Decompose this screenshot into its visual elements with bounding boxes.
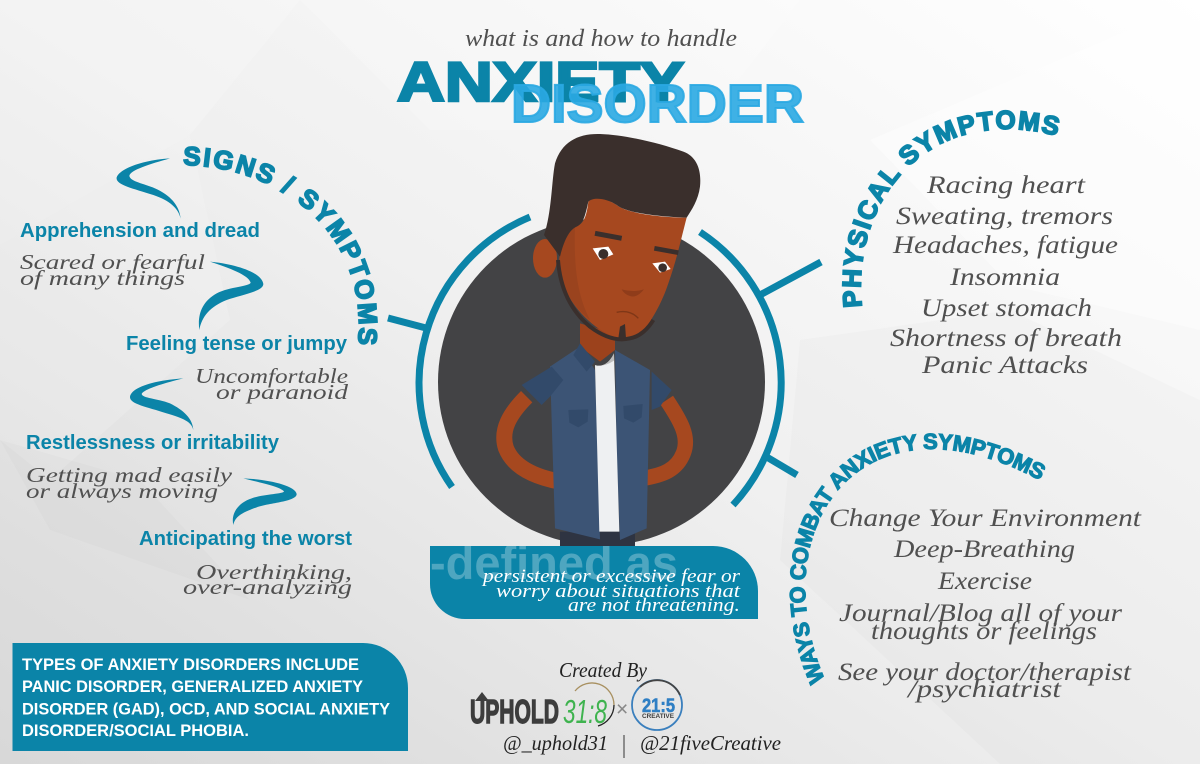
definition text: persistent or excessive fear or <box>481 567 741 587</box>
connector: signs <box>388 318 426 328</box>
swoosh connector 2 <box>199 262 263 330</box>
item: restlessness or irritability <box>26 432 280 503</box>
ring: right arc <box>700 232 781 505</box>
title word: anxiety: ANXIETY <box>397 50 684 113</box>
item description: or always moving <box>26 479 218 503</box>
item description: or paranoid <box>216 380 348 404</box>
title word: disorder: DISORDER <box>511 74 804 134</box>
list: ways to combat <box>829 503 1142 703</box>
panel: types of anxiety disorders <box>12 643 408 751</box>
heading: signs / symptoms: SIGNS / SYMPTOMS <box>183 146 378 345</box>
item description: Getting mad easily <box>26 463 233 487</box>
list: ways to combat: Journal/Blog all of your <box>839 598 1122 627</box>
item description: over-analyzing <box>183 575 352 599</box>
heading: ways to combat anxiety symptoms: WAYS TO COMBAT ANXIETY SYMPTOMS <box>789 433 1046 686</box>
item heading: Feeling tense or jumpy <box>126 333 348 355</box>
central figure in circle <box>388 134 821 548</box>
definition text: are not threatening. <box>568 596 740 616</box>
list: physical symptoms: Shortness of breath <box>890 323 1122 352</box>
item description <box>20 250 205 290</box>
list: ways to combat: Change Your Environment <box>829 503 1142 532</box>
list: physical symptoms: Sweating, tremors <box>896 201 1113 230</box>
list: physical symptoms: Upset stomach <box>921 293 1092 322</box>
credits <box>470 658 781 758</box>
item description <box>183 560 352 599</box>
item heading: Anticipating the worst <box>139 528 352 550</box>
list: physical symptoms <box>890 170 1122 379</box>
logo: uphold 31:8: 31:8 <box>563 693 607 730</box>
panel text <box>22 656 390 740</box>
ring: left arc <box>419 217 530 487</box>
list: physical symptoms: Panic Attacks <box>921 350 1088 379</box>
list: ways to combat: Exercise <box>937 566 1032 595</box>
item description: Overthinking, <box>196 560 352 584</box>
title <box>397 50 804 134</box>
panel text: DISORDER/SOCIAL PHOBIA. <box>22 722 249 740</box>
item description: Uncomfortable <box>195 364 349 388</box>
swoosh connector 3 <box>130 378 193 430</box>
item heading: Restlessness or irritability <box>26 432 280 454</box>
subtitle: what is and how to handle <box>465 26 737 52</box>
list: ways to combat: See your doctor/therapist <box>838 657 1132 686</box>
item description: of many things <box>20 266 185 290</box>
created by: Created By <box>559 658 648 682</box>
item description <box>26 463 233 503</box>
heading: physical symptoms: PHYSICAL SYMPTOMS <box>842 110 1060 308</box>
list: ways to combat: thoughts or feelings <box>871 616 1097 645</box>
list: ways to combat: Deep-Breathing <box>893 534 1075 563</box>
watermark: defined as: -defined as <box>430 536 678 589</box>
list: physical symptoms: Insomnia <box>949 262 1060 291</box>
item heading: Apprehension and dread <box>20 220 260 242</box>
panel text: PANIC DISORDER, GENERALIZED ANXIETY <box>22 678 363 696</box>
item: anticipating the worst <box>139 528 352 599</box>
handle: 21five creative: @21fiveCreative <box>640 731 781 755</box>
illustration: man <box>504 134 700 548</box>
handle: uphold: @_uphold31 <box>503 731 608 755</box>
panel text: DISORDER (GAD), OCD, AND SOCIAL ANXIETY <box>22 700 390 718</box>
panel text: TYPES OF ANXIETY DISORDERS INCLUDE <box>22 656 359 674</box>
connector: combat <box>765 456 797 475</box>
item description: Scared or fearful <box>20 250 205 274</box>
item: feeling tense or jumpy <box>126 333 349 404</box>
logo: 21:5 creative: 21:5 <box>642 696 675 717</box>
panel: definition <box>430 546 758 619</box>
item description <box>195 364 349 404</box>
swoosh connector 1 <box>117 158 181 219</box>
multiply sign: × <box>616 698 628 721</box>
list: ways to combat: /psychiatrist <box>906 674 1062 703</box>
logo: 21:5 creative: CREATIVE <box>642 713 675 720</box>
connector: physical <box>760 262 821 295</box>
list: physical symptoms: Headaches, fatigue <box>892 230 1118 259</box>
logo: uphold 31:8: UPHOLD <box>470 693 559 730</box>
item: apprehension and dread <box>20 220 260 290</box>
logo: 21:5 creative <box>632 680 682 730</box>
dark circle <box>438 218 765 546</box>
definition text: worry about situations that <box>496 582 741 602</box>
panel background <box>12 643 408 751</box>
panel background <box>430 546 758 619</box>
list: physical symptoms: Racing heart <box>926 170 1086 199</box>
swoosh connector 4 <box>233 478 297 525</box>
definition text <box>481 567 741 616</box>
